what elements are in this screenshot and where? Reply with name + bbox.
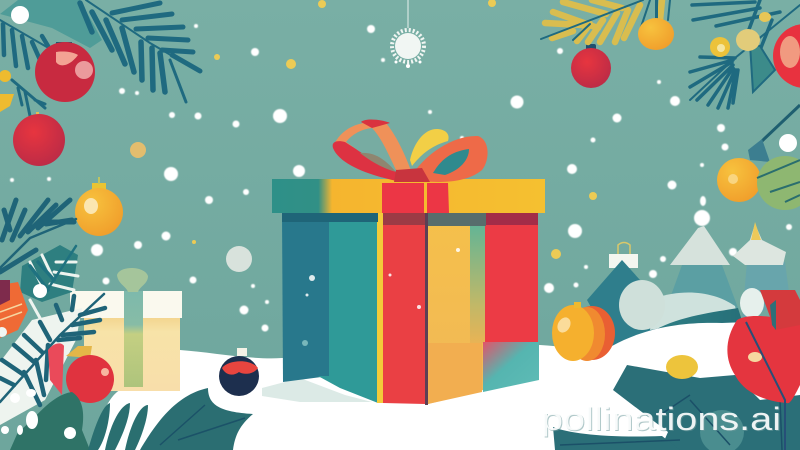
bow top tip — [361, 119, 390, 128]
leaf spot — [748, 352, 762, 362]
tree left body — [665, 265, 738, 312]
bow right inner teal — [433, 149, 469, 175]
watermark: pollinations.ai — [542, 402, 782, 438]
lid ribbon — [382, 183, 449, 213]
left dark face — [282, 213, 329, 382]
orange ball top-right — [638, 0, 674, 50]
middle frond — [30, 246, 76, 295]
tree right snow cap — [733, 224, 786, 265]
bow left lower loop — [333, 141, 402, 182]
bow yellow middle loop — [410, 129, 449, 166]
green panel — [470, 213, 485, 343]
tree right body — [742, 262, 790, 320]
tree tip — [751, 222, 761, 240]
watermark: pollinations.ai — [541, 401, 781, 437]
left teal face — [318, 213, 378, 403]
small gold ornaments top-right — [710, 12, 771, 57]
white backing behind lower needles — [0, 308, 82, 425]
red ornament with gold cap bottom-left — [48, 343, 114, 403]
bow right loop — [408, 136, 488, 182]
left pine frond — [0, 20, 52, 116]
gift bow — [117, 268, 148, 292]
dark frond blades bottom — [88, 403, 148, 450]
white specks on branch — [11, 6, 29, 24]
bow knot — [394, 168, 430, 182]
gold panel — [428, 213, 483, 404]
tree left snow cap — [670, 226, 730, 265]
tan ornament dot — [130, 142, 146, 158]
red ornament top-right — [571, 44, 611, 88]
round snow boulder — [619, 280, 665, 330]
small dark red ornament — [219, 348, 259, 396]
dark pine frond top-right — [690, 0, 800, 108]
small cream gift — [70, 268, 182, 391]
top-left pine frond — [80, 0, 200, 102]
bow hole — [346, 128, 397, 172]
bow — [333, 119, 488, 182]
snow ground — [90, 320, 800, 450]
snow spots bottom-left — [1, 389, 76, 439]
upper dark frond — [0, 200, 76, 272]
snow-capped trees and ornament scene — [587, 222, 790, 347]
bottom-left pine fronds with white needles — [0, 200, 105, 425]
green ornament right — [757, 156, 800, 210]
gift body — [84, 317, 180, 391]
red ribbon panel — [383, 213, 425, 404]
red ornament lower-left — [13, 112, 65, 166]
dark teal triangle tree — [587, 260, 663, 347]
orange pumpkin ornament — [552, 302, 615, 361]
red leaf ornament right — [727, 290, 800, 450]
gift ribbon — [124, 291, 143, 387]
teal backing behind upper needles — [20, 245, 78, 302]
red right panel — [485, 213, 538, 342]
white blob right tree — [740, 288, 764, 318]
yellow pine frond top-right — [541, 0, 670, 42]
dark hill — [650, 308, 745, 345]
icon: snowflake ornament — [392, 0, 424, 68]
corner seam — [425, 213, 428, 405]
orange ornament right — [717, 158, 761, 202]
box speckles — [302, 248, 460, 346]
yellow blob — [666, 355, 698, 379]
bow hole shadow — [360, 153, 396, 172]
lower dark frond — [0, 294, 105, 405]
dark green bush bottom-left — [10, 392, 90, 450]
large pale snow ball — [226, 246, 252, 272]
yellow strip — [377, 213, 383, 403]
top-left light teal branch — [0, 0, 102, 48]
branch and clip right — [748, 105, 800, 162]
snow mound — [650, 292, 737, 330]
drift shadow behind box — [262, 378, 372, 402]
white needles — [30, 255, 78, 318]
yellow ornament fragments left — [0, 70, 14, 112]
gift lid — [70, 291, 182, 318]
red ornament right edge — [773, 24, 800, 88]
main gift box — [262, 179, 545, 405]
yellow confetti dots — [192, 0, 597, 259]
shadow band — [282, 213, 378, 222]
teal lower panel — [483, 342, 539, 392]
lid — [272, 179, 545, 213]
orange ornament left — [75, 177, 123, 236]
red ornament top-left — [35, 42, 95, 102]
orange lower panel — [428, 343, 482, 404]
red and orange ornament far left — [0, 280, 47, 338]
bow left upper loop — [333, 122, 414, 182]
holly leaf bottom centre — [140, 388, 253, 450]
dark leaf bottom right — [553, 365, 800, 450]
snowfall dots — [10, 24, 792, 332]
ornament hanger — [609, 242, 638, 268]
